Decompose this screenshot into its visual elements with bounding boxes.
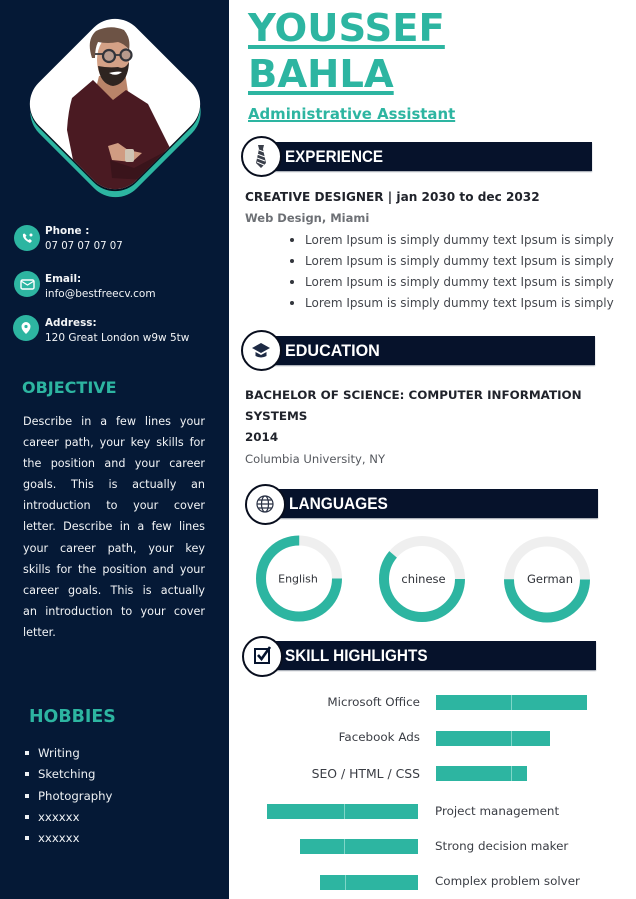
donut: English: English bbox=[278, 572, 318, 586]
contact: phone: 07 07 07 07 07 bbox=[45, 241, 123, 252]
contact: email bbox=[45, 273, 156, 300]
icon: email bbox=[14, 271, 40, 297]
text: objective description: introduction to your cover bbox=[23, 499, 205, 512]
experience: role: CREATIVE DESIGNER | jan 2030 to dec 2032 bbox=[245, 190, 540, 204]
skill: Project management: Project management bbox=[435, 804, 559, 818]
section header: skill highlights bbox=[242, 636, 596, 677]
panel: sidebar bbox=[0, 0, 229, 899]
icon: tie bbox=[241, 136, 282, 177]
section header: education bbox=[241, 330, 596, 371]
icon: location pin bbox=[13, 315, 39, 341]
list: hobbies: Sketching bbox=[38, 767, 95, 781]
education: degree bbox=[245, 388, 582, 444]
contact: email: Email: bbox=[45, 273, 81, 285]
text: objective description: goals. This is actually an bbox=[23, 478, 205, 491]
donut chart: languages bbox=[256, 536, 590, 622]
list: hobbies: xxxxxx bbox=[38, 831, 80, 845]
donut: English bbox=[261, 540, 337, 616]
text: objective description: Describe in a few lines your bbox=[23, 415, 205, 428]
contact: address: Address: bbox=[45, 317, 97, 329]
bar chart: skill highlights bbox=[267, 695, 587, 890]
icon: phone bbox=[14, 225, 40, 251]
list: hobbies: Photography bbox=[38, 789, 112, 803]
text: objective description: your career path, your key bbox=[23, 542, 205, 555]
skill: Microsoft Office: Microsoft Office bbox=[327, 695, 420, 709]
text: objective description: the position and your career bbox=[23, 457, 205, 470]
donut: chinese: chinese bbox=[401, 572, 446, 586]
list: hobbies: Writing bbox=[38, 746, 80, 760]
section header: languages bbox=[245, 484, 598, 525]
text: objective description: skills for the position and your bbox=[23, 563, 205, 576]
education: degree: BACHELOR OF SCIENCE: COMPUTER INFORMATION SYSTEMS bbox=[245, 388, 582, 423]
section header: skill highlights: SKILL HIGHLIGHTS bbox=[285, 646, 428, 665]
experience: company: Web Design, Miami bbox=[245, 211, 369, 225]
title: name: BAHLA bbox=[248, 52, 394, 97]
profile photo in rounded diamond bbox=[30, 18, 201, 198]
text: objective description: career path, your key skills for bbox=[23, 436, 205, 449]
subtitle: job title: Administrative Assistant bbox=[248, 105, 455, 123]
heading: objective: OBJECTIVE bbox=[22, 378, 117, 397]
contact: email: info@bestfreecv.com bbox=[45, 288, 156, 300]
contact: address bbox=[45, 317, 189, 344]
contact: phone bbox=[45, 225, 123, 252]
heading: hobbies: HOBBIES bbox=[29, 707, 116, 727]
title: name bbox=[248, 6, 445, 97]
skill: Complex problem solver: Complex problem solver bbox=[435, 874, 580, 888]
experience: bullet list bbox=[290, 233, 614, 310]
section header: languages: LANGUAGES bbox=[289, 494, 388, 513]
donut: German: German bbox=[527, 572, 573, 586]
icon: graduation cap bbox=[241, 330, 282, 371]
skill: SEO / HTML / CSS: SEO / HTML / CSS bbox=[312, 766, 420, 781]
education: school: Columbia University, NY bbox=[245, 452, 385, 466]
donut: German bbox=[509, 542, 585, 618]
education: degree: 2014 bbox=[245, 430, 278, 444]
donut: chinese bbox=[384, 541, 460, 617]
section header: experience: EXPERIENCE bbox=[285, 147, 383, 166]
text: objective description: letter. bbox=[23, 626, 56, 639]
icon: globe bbox=[245, 484, 286, 525]
skill: Strong decision maker: Strong decision maker bbox=[435, 839, 568, 853]
text: objective description: letter. Describe in a few lines bbox=[23, 520, 205, 533]
contact: phone: Phone : bbox=[45, 225, 89, 237]
experience: bullet list: Lorem Ipsum is simply dummy text Ipsum is simply bbox=[305, 296, 614, 310]
skill: Facebook Ads: Facebook Ads bbox=[339, 730, 420, 744]
text: objective description bbox=[23, 415, 205, 639]
section header: education: EDUCATION bbox=[285, 341, 380, 360]
title: name: YOUSSEF bbox=[248, 6, 445, 51]
list: hobbies bbox=[25, 746, 112, 845]
experience: bullet list: Lorem Ipsum is simply dummy text Ipsum is simply bbox=[305, 233, 614, 247]
section header: experience bbox=[241, 136, 592, 177]
contact: address: 120 Great London w9w 5tw bbox=[45, 332, 189, 344]
icon: checkbox bbox=[242, 636, 283, 677]
list: hobbies: xxxxxx bbox=[38, 810, 80, 824]
text: objective description: an introduction to your cover bbox=[23, 605, 205, 618]
text: objective description: career goals. This is actually bbox=[23, 584, 205, 597]
experience: bullet list: Lorem Ipsum is simply dummy text Ipsum is simply bbox=[305, 275, 614, 289]
experience: bullet list: Lorem Ipsum is simply dummy text Ipsum is simply bbox=[305, 254, 614, 268]
